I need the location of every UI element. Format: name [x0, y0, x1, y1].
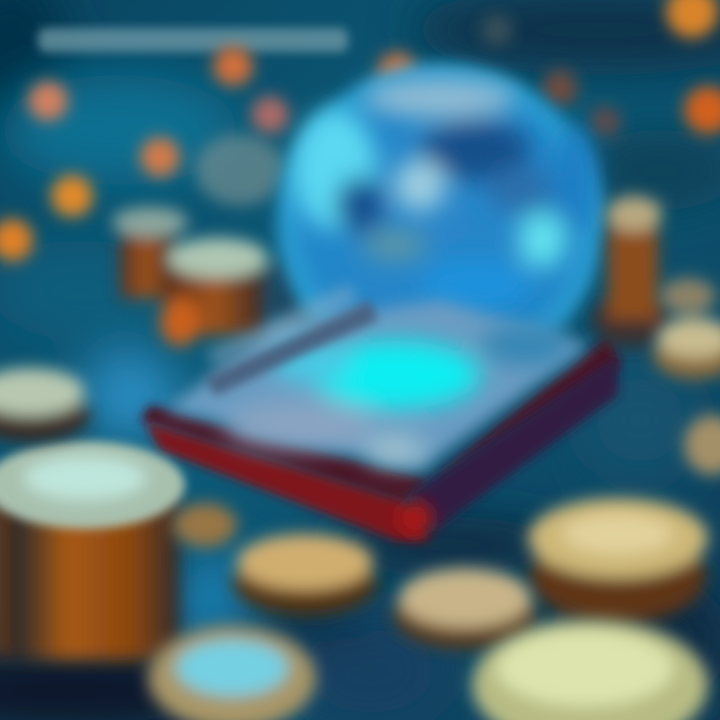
right coins — [653, 278, 720, 475]
title (illegible blurred text strip) — [38, 28, 348, 52]
open book with red cover — [140, 300, 620, 540]
reflected magnifier highlight — [205, 285, 358, 366]
right cup — [592, 196, 668, 348]
magnifier handle — [205, 300, 378, 396]
front-left big cup — [0, 441, 185, 660]
left mid coin — [0, 368, 90, 441]
back-left cups — [112, 134, 301, 346]
crystal globe — [277, 64, 603, 380]
front coins — [148, 498, 708, 720]
floating orange lights — [0, 0, 720, 261]
